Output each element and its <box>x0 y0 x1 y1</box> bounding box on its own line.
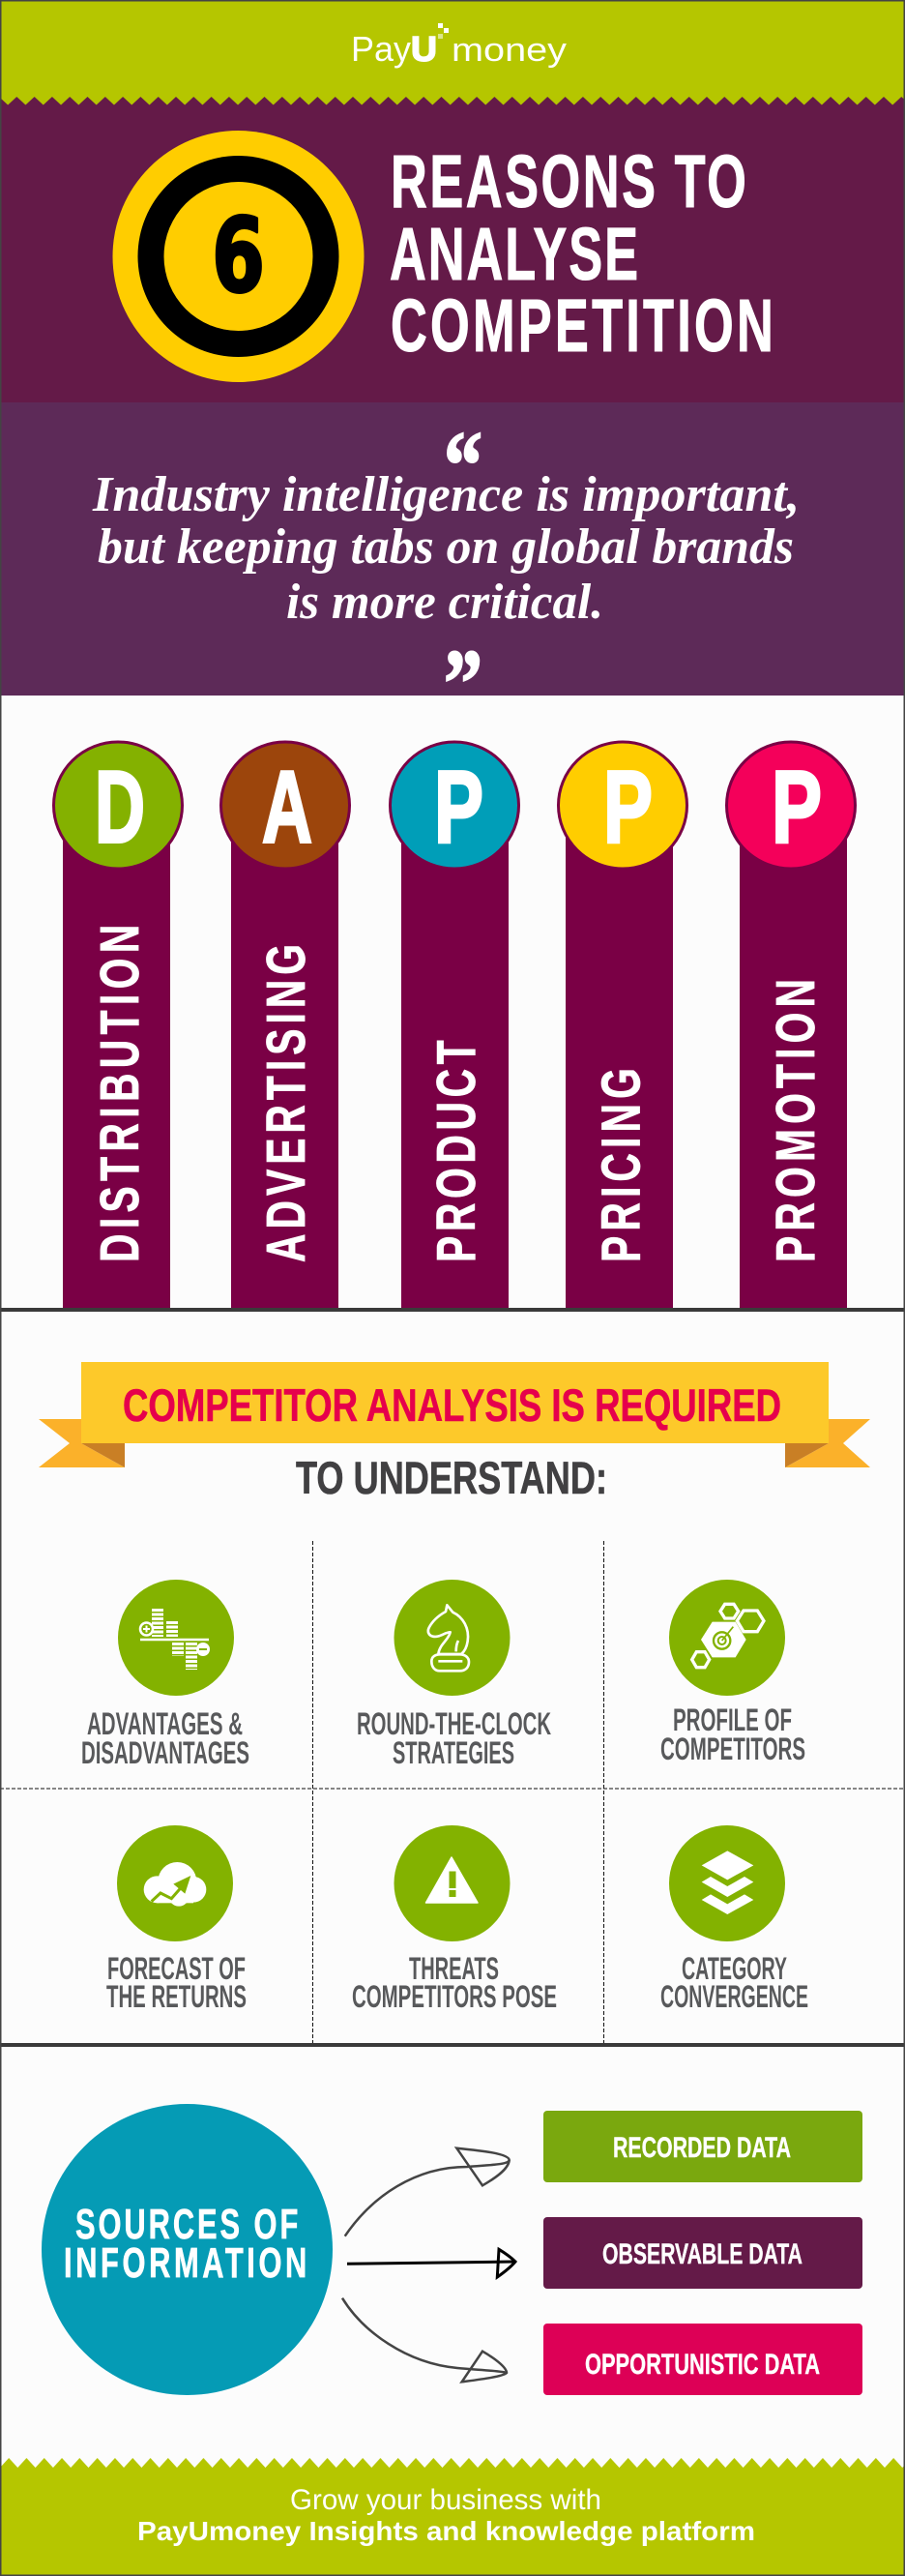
item: forecast of the returns <box>106 1825 247 2014</box>
box: observable data: OBSERVABLE DATA <box>602 2238 803 2270</box>
icon: number 6 badge: 6 <box>212 196 265 315</box>
column: advertising: ADVERTISING <box>256 944 317 1262</box>
logo: PayUmoney <box>351 23 567 69</box>
panel: footer <box>0 2458 905 2576</box>
quote text: Industry intelligence is important, <box>92 467 800 522</box>
column: distribution: D <box>95 751 145 865</box>
box: opportunistic data: OPPORTUNISTIC DATA <box>585 2349 820 2381</box>
label: COMPETITORS POSE <box>352 1979 557 2014</box>
quote text: but keeping tabs on global brands <box>98 519 794 575</box>
column: advertising <box>220 742 350 1308</box>
panel: DAPPP columns <box>54 742 855 1308</box>
footer text: PayUmoney Insights and knowledge platform <box>137 2516 755 2546</box>
column: pricing: P <box>603 751 653 865</box>
arrow: to recorded data <box>345 2148 510 2236</box>
column: pricing <box>559 742 686 1308</box>
item: category convergence <box>660 1825 808 2014</box>
box: observable data <box>543 2217 862 2289</box>
label: DISADVANTAGES <box>81 1735 249 1770</box>
box: recorded data: RECORDED DATA <box>613 2132 791 2164</box>
logo: PayUmoney: U <box>411 29 437 69</box>
source circle: SOURCES OF <box>75 2202 298 2248</box>
item: round-the-clock strategies <box>357 1580 551 1770</box>
title text: COMPETITION <box>391 283 774 367</box>
label: ADVANTAGES & <box>87 1706 243 1741</box>
icon: chess knight <box>428 1605 469 1671</box>
label: THE RETURNS <box>106 1979 247 2014</box>
opening quote mark: “ <box>444 411 482 518</box>
column: pricing: PRICING <box>591 1068 652 1262</box>
source circle: INFORMATION <box>64 2240 307 2287</box>
label: PROFILE OF <box>673 1703 792 1737</box>
panel: logo header <box>0 0 905 97</box>
column: promotion: PROMOTION <box>766 979 827 1262</box>
column: advertising: A <box>262 751 312 865</box>
icon: stacked layers <box>702 1851 753 1914</box>
quote text: is more critical. <box>286 575 603 630</box>
label <box>352 1951 557 2014</box>
source circle <box>42 2104 333 2395</box>
title text: REASONS TO <box>391 139 746 222</box>
quote text <box>92 467 800 630</box>
label <box>106 1951 247 2014</box>
panel: title band <box>0 97 905 402</box>
label: CATEGORY <box>682 1951 787 1986</box>
subheading: TO UNDERSTAND: <box>296 1452 607 1503</box>
label: CONVERGENCE <box>660 1979 808 2014</box>
label: COMPETITORS <box>660 1732 805 1766</box>
icon: cloud with rising arrow <box>144 1862 206 1907</box>
label <box>660 1703 805 1766</box>
icon: plus and minus stacks <box>140 1609 210 1670</box>
column: distribution: DISTRIBUTION <box>90 925 151 1262</box>
footer text <box>137 2484 755 2546</box>
column: product: P <box>434 751 483 865</box>
label <box>81 1706 249 1770</box>
icon: number 6 badge <box>112 131 364 382</box>
panel: quote <box>0 402 905 737</box>
banner ribbon <box>39 1362 870 1467</box>
item: threats competitors pose <box>352 1825 557 2014</box>
column: distribution <box>54 742 182 1308</box>
box: recorded data <box>543 2111 862 2182</box>
panel: competitor analysis <box>0 1362 905 2047</box>
column: product <box>391 742 518 1308</box>
closing quote mark: ” <box>444 630 482 737</box>
box: opportunistic data <box>543 2324 862 2395</box>
label <box>660 1951 808 2014</box>
column: product: PRODUCT <box>426 1040 487 1262</box>
item: profile of competitors <box>660 1580 805 1766</box>
title text: ANALYSE <box>390 212 638 295</box>
label <box>357 1706 551 1770</box>
logo: PayUmoney: Pay <box>351 29 411 69</box>
label: FORECAST OF <box>107 1951 246 1986</box>
footer text: Grow your business with <box>290 2484 601 2516</box>
label: STRATEGIES <box>393 1735 514 1770</box>
label: THREATS <box>409 1951 499 1986</box>
logo: PayUmoney: money <box>452 32 567 69</box>
arrow: to opportunistic data <box>342 2298 507 2382</box>
item: advantages and disadvantages <box>81 1580 249 1770</box>
arrow: to observable data <box>347 2249 515 2277</box>
column: promotion <box>727 742 855 1308</box>
label: ROUND-THE-CLOCK <box>357 1706 551 1741</box>
column: promotion: P <box>772 751 822 865</box>
title text <box>390 139 774 367</box>
icon: warning triangle <box>425 1857 478 1903</box>
icon: target hexagons <box>692 1604 764 1668</box>
panel: sources of information <box>42 2104 862 2395</box>
